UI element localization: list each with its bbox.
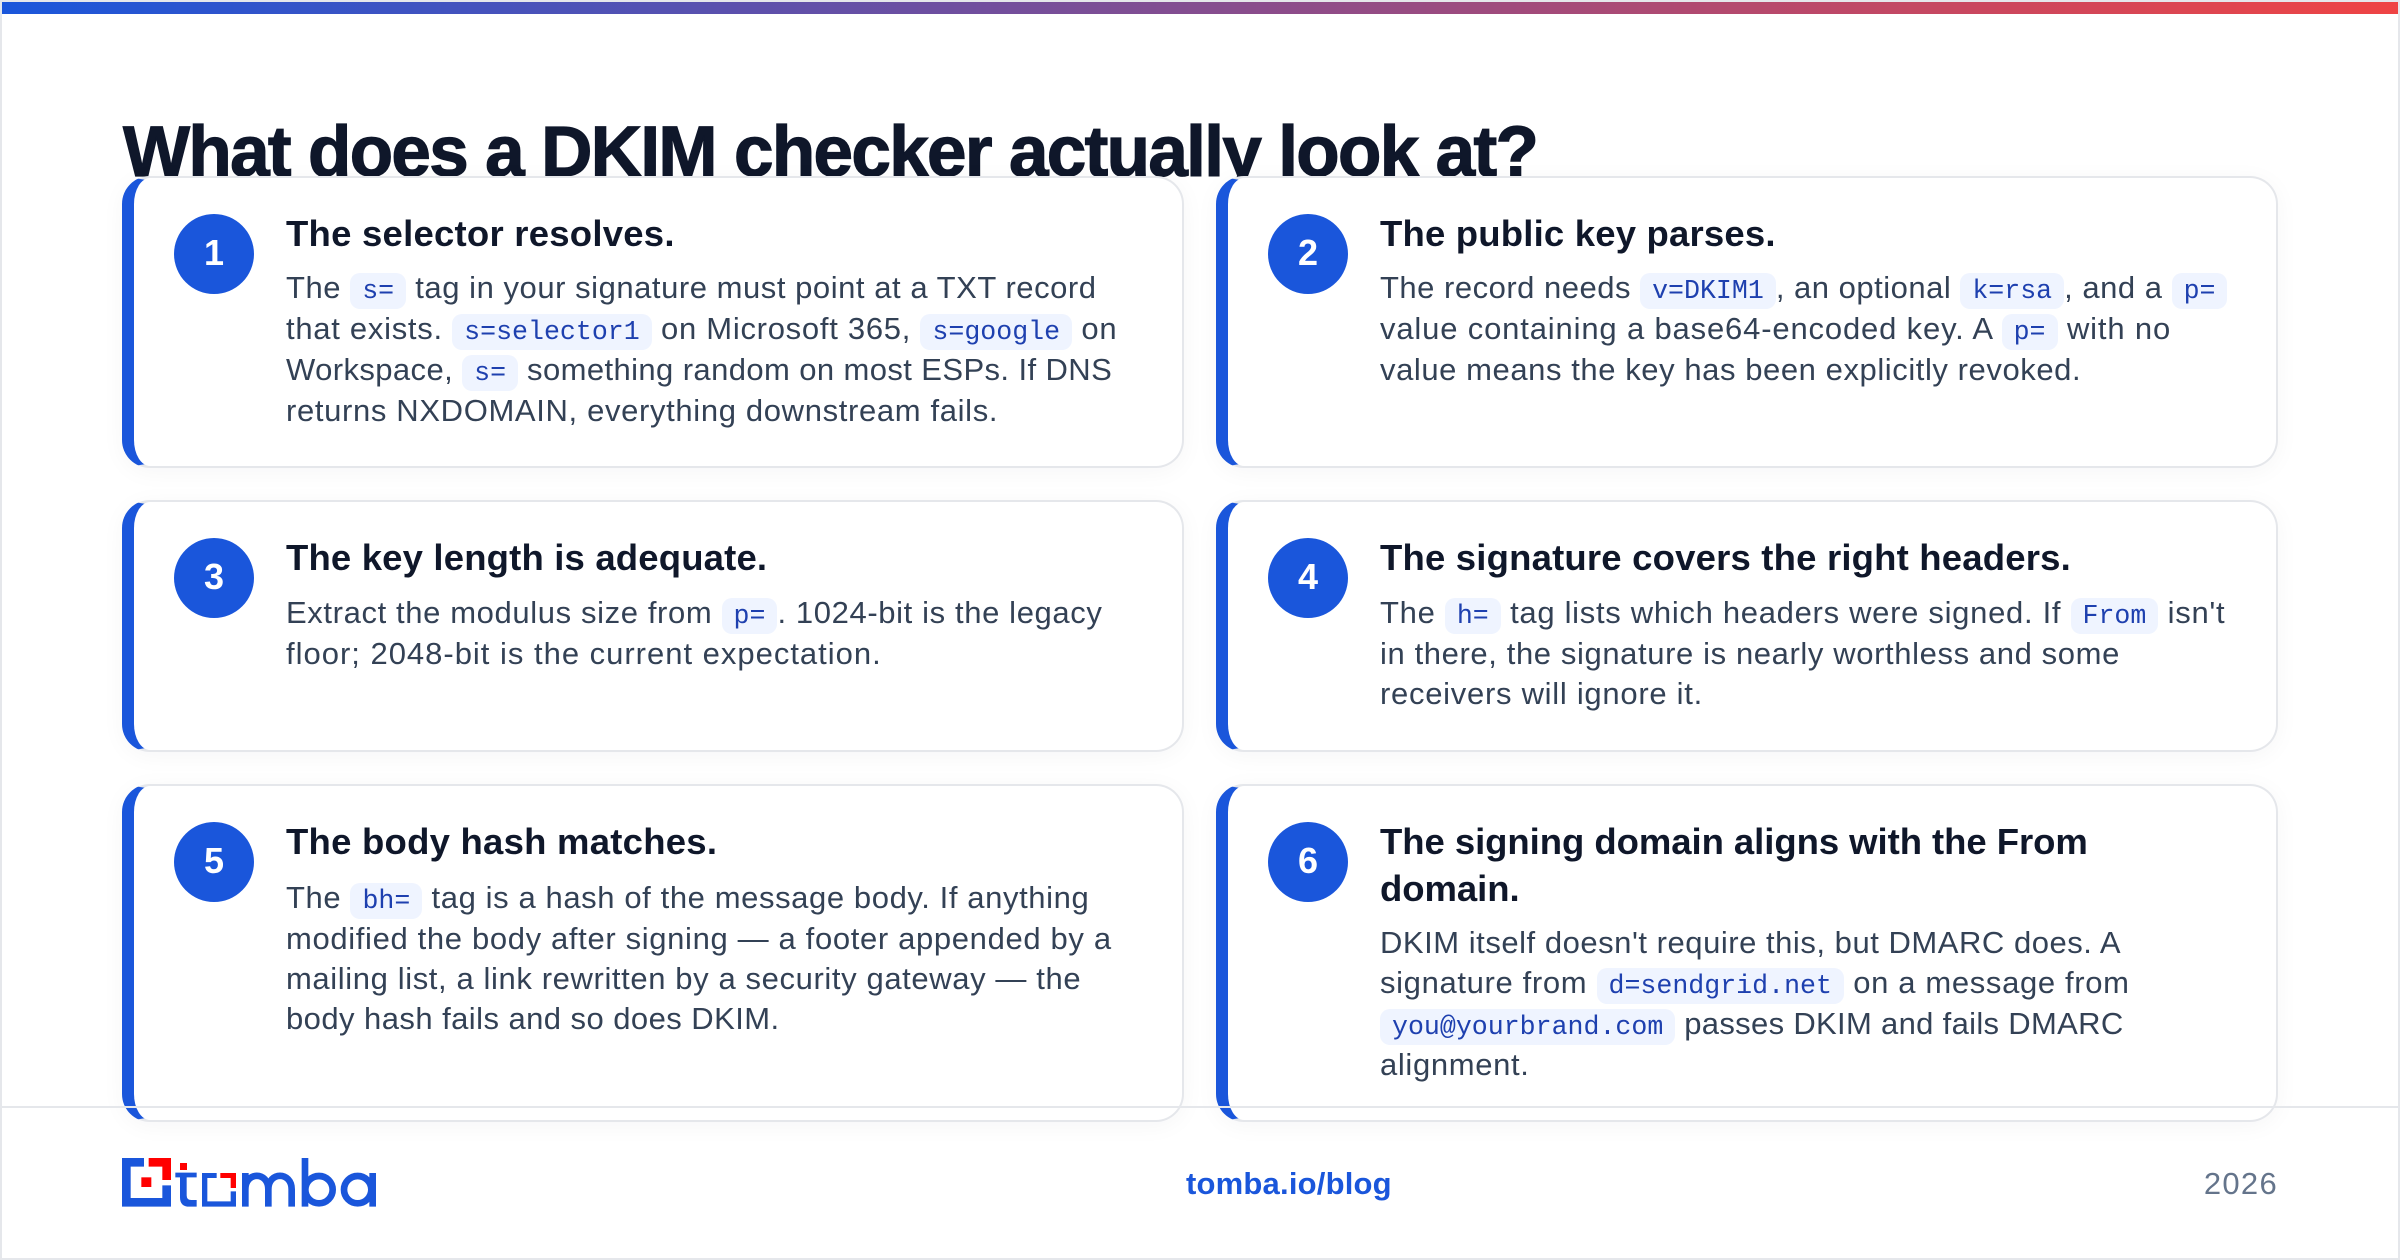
icon: tomba logo (122, 1158, 376, 1207)
number badge 2: 2 (1298, 232, 1318, 273)
body text card 2: v=DKIM1 (1652, 276, 1764, 306)
heading card 1: The selector resolves. (286, 213, 675, 254)
body text card 5: mailing list, a link rewritten by a security gateway — the (286, 961, 1081, 996)
footer divider (0, 1106, 2400, 1108)
panel: card 4 signed headers (1216, 500, 2278, 752)
number badge 1 (174, 214, 254, 294)
body text card 2: value containing a base64-encoded key. A with no (1380, 311, 2171, 346)
body text card 4: receivers will ignore it. (1380, 676, 1703, 711)
body text card 5: body hash fails and so does DKIM. (286, 1001, 780, 1036)
panel: card 5 body hash (122, 784, 1184, 1122)
body text card 2: p= (2184, 276, 2215, 306)
body text card 1: s= (362, 276, 394, 306)
body text card 6: DKIM itself doesn't require this, but DMARC does. A (1380, 925, 2121, 960)
body text card 4: in there, the signature is nearly worthless and some (1380, 636, 2120, 671)
number badge 5: 5 (204, 840, 224, 881)
body text card 5: The tag is a hash of the message body. If anything (286, 880, 1089, 914)
heading card 6: domain. (1380, 868, 1520, 909)
body text card 4: The tag lists which headers were signed. If isn't (1380, 595, 2225, 630)
footer link: tomba.io/blog (1186, 1166, 1392, 1201)
body text card 1: The tag in your signature must point at a TXT record (286, 270, 1097, 305)
heading card 3: The key length is adequate. (286, 537, 767, 578)
heading card 6: The signing domain aligns with the From (1380, 821, 2088, 862)
body text card 5 (286, 880, 1112, 1036)
number badge 6: 6 (1298, 840, 1318, 881)
number badge 6 (1268, 822, 1348, 902)
body text card 2: value means the key has been explicitly revoked. (1380, 352, 2081, 387)
body text card 2: k=rsa (1972, 276, 2052, 306)
body text card 1: Workspace, something random on most ESPs. If DNS (286, 352, 1112, 387)
heading card 4: The signature covers the right headers. (1380, 537, 2071, 578)
body text card 6: alignment. (1380, 1047, 1530, 1082)
heading card 5: The body hash matches. (286, 821, 717, 862)
title: What does a DKIM checker actually look at? (123, 113, 1537, 192)
body text card 3: p= (734, 601, 765, 631)
body text card 6: d=sendgrid.net (1609, 971, 1832, 1001)
body text card 1: s= (474, 358, 506, 388)
body text card 6: you@yourbrand.com (1392, 1012, 1663, 1042)
number badge 3: 3 (204, 556, 224, 597)
panel: card 1 selector (122, 176, 1184, 468)
body text card 3: Extract the modulus size from . 1024-bit is the legacy (286, 595, 1103, 630)
body text card 4: h= (1457, 601, 1489, 631)
body text card 1: that exists. on Microsoft 365, on (286, 311, 1117, 346)
heading card 2: The public key parses. (1380, 213, 1776, 254)
number badge 2 (1268, 214, 1348, 294)
number badge 5 (174, 822, 254, 902)
body text card 6: signature from on a message from (1380, 965, 2130, 1000)
number badge 4 (1268, 538, 1348, 618)
gradient top bar (2, 2, 2398, 14)
body text card 4 (1380, 595, 2225, 711)
body text card 1 (286, 270, 1117, 428)
panel: card 3 key length (122, 500, 1184, 752)
body text card 3 (286, 595, 1103, 671)
number badge 1: 1 (204, 232, 224, 273)
body text card 3: floor; 2048-bit is the current expectation. (286, 636, 882, 671)
body text card 1: returns NXDOMAIN, everything downstream fails. (286, 393, 998, 428)
heading card 6 (1380, 821, 2088, 909)
body text card 4: From (2083, 601, 2146, 631)
footer year: 2026 (2204, 1166, 2278, 1201)
body text card 1: s=selector1 (464, 317, 640, 347)
body text card 5: bh= (362, 886, 410, 916)
number badge 3 (174, 538, 254, 618)
body text card 2: p= (2014, 317, 2046, 347)
body text card 5: modified the body after signing — a footer appended by a (286, 920, 1112, 956)
panel: card 6 domain alignment (1216, 784, 2278, 1122)
body text card 2 (1380, 270, 2227, 387)
body text card 6: passes DKIM and fails DMARC (1684, 1006, 2124, 1041)
body text card 1: s=google (932, 317, 1060, 347)
body text card 2: The record needs , an optional , and a (1380, 270, 2162, 305)
number badge 4: 4 (1298, 556, 1318, 597)
body text card 6 (1380, 925, 2130, 1082)
panel: card 2 public key (1216, 176, 2278, 468)
